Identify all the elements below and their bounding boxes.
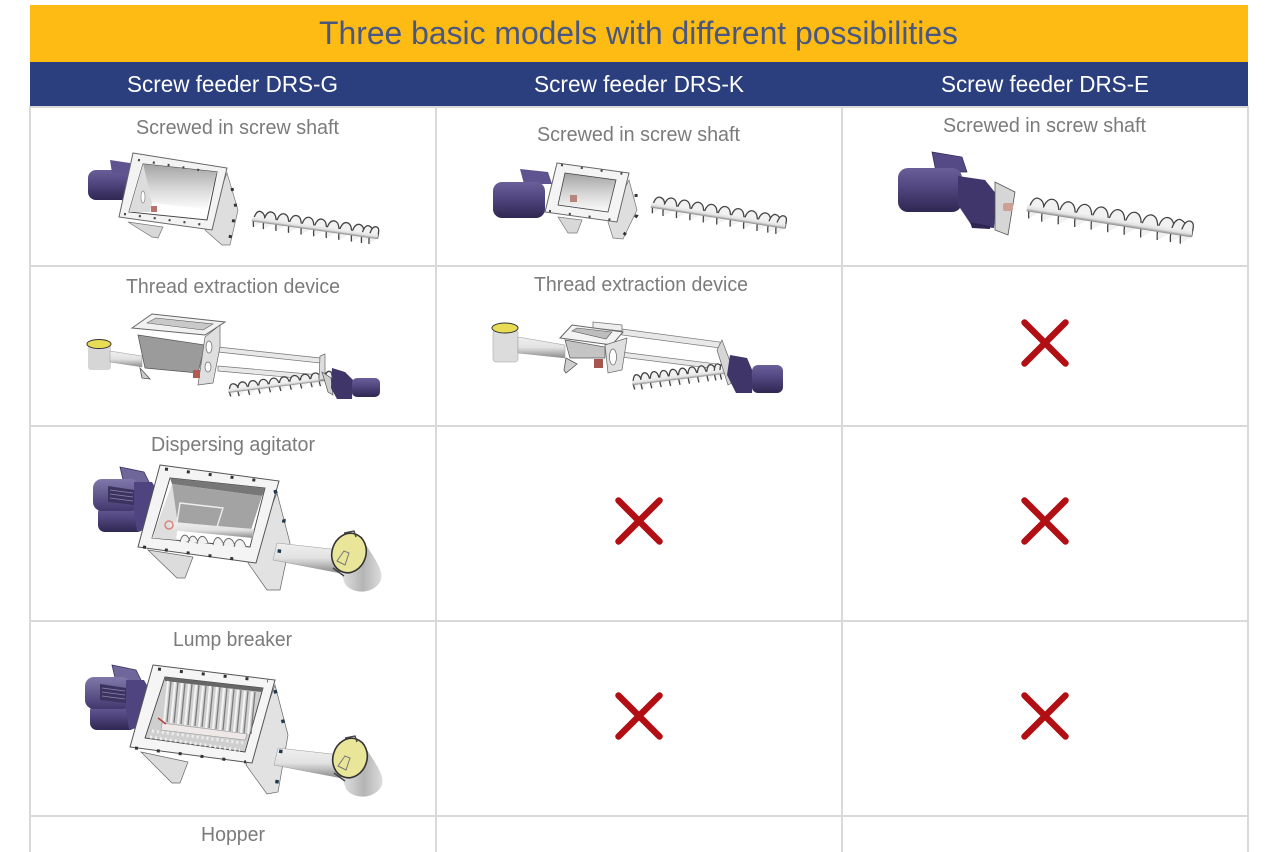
cell: DRS-K dispersing agitator not available: [436, 426, 842, 621]
cell: DRS-E hopper row: [842, 816, 1248, 852]
machine illustration: DRS-K with screw: [493, 163, 787, 239]
title: Three basic models with different possibilities: [319, 15, 958, 51]
machine illustration: lump breaker: [85, 665, 382, 797]
label: Hopper: [201, 824, 265, 846]
cell: DRS-G screwed in screw shaft: [30, 107, 436, 266]
column heading: DRS-K: Screw feeder DRS-K: [534, 71, 745, 97]
machine illustration: agitator: [93, 465, 381, 592]
cell: DRS-K hopper row: [436, 816, 842, 852]
cell: DRS-K lump breaker not available: [436, 621, 842, 816]
column header row: [30, 62, 1248, 107]
icon: red cross: [1024, 322, 1066, 364]
cell: DRS-K screwed in screw shaft: [436, 107, 842, 266]
cell: DRS-E screwed in screw shaft: [842, 107, 1248, 266]
cell: DRS-E lump breaker not available: [842, 621, 1248, 816]
cell: DRS-G lump breaker: [30, 621, 436, 816]
icon: red cross: [1024, 500, 1066, 542]
icon: red cross: [1024, 696, 1066, 736]
label: Screwed in screw shaft: [136, 117, 339, 139]
cell: DRS-G thread extraction device: [30, 266, 436, 426]
label: Thread extraction device: [534, 274, 748, 296]
label: Thread extraction device: [126, 276, 340, 298]
cell: DRS-G hopper: [30, 816, 436, 852]
cell: DRS-E thread extraction not available: [842, 266, 1248, 426]
title banner: [30, 5, 1248, 62]
label: Lump breaker: [173, 629, 292, 651]
label: Screwed in screw shaft: [537, 124, 740, 146]
cell: DRS-K thread extraction device: [436, 266, 842, 426]
icon: red cross: [618, 696, 660, 736]
column heading: DRS-G: Screw feeder DRS-G: [127, 71, 338, 97]
cell: DRS-G dispersing agitator: [30, 426, 436, 621]
column heading: DRS-E: Screw feeder DRS-E: [941, 71, 1149, 97]
machine illustration: DRS-E with screw: [898, 152, 1194, 245]
label: Screwed in screw shaft: [943, 115, 1146, 137]
icon: red cross: [618, 500, 660, 542]
machine illustration: DRS-K extraction: [492, 322, 783, 393]
cell: DRS-E dispersing agitator not available: [842, 426, 1248, 621]
machine illustration: DRS-G extraction: [87, 314, 380, 399]
label: Dispersing agitator: [151, 434, 315, 456]
machine illustration: DRS-G with screw: [88, 153, 379, 245]
